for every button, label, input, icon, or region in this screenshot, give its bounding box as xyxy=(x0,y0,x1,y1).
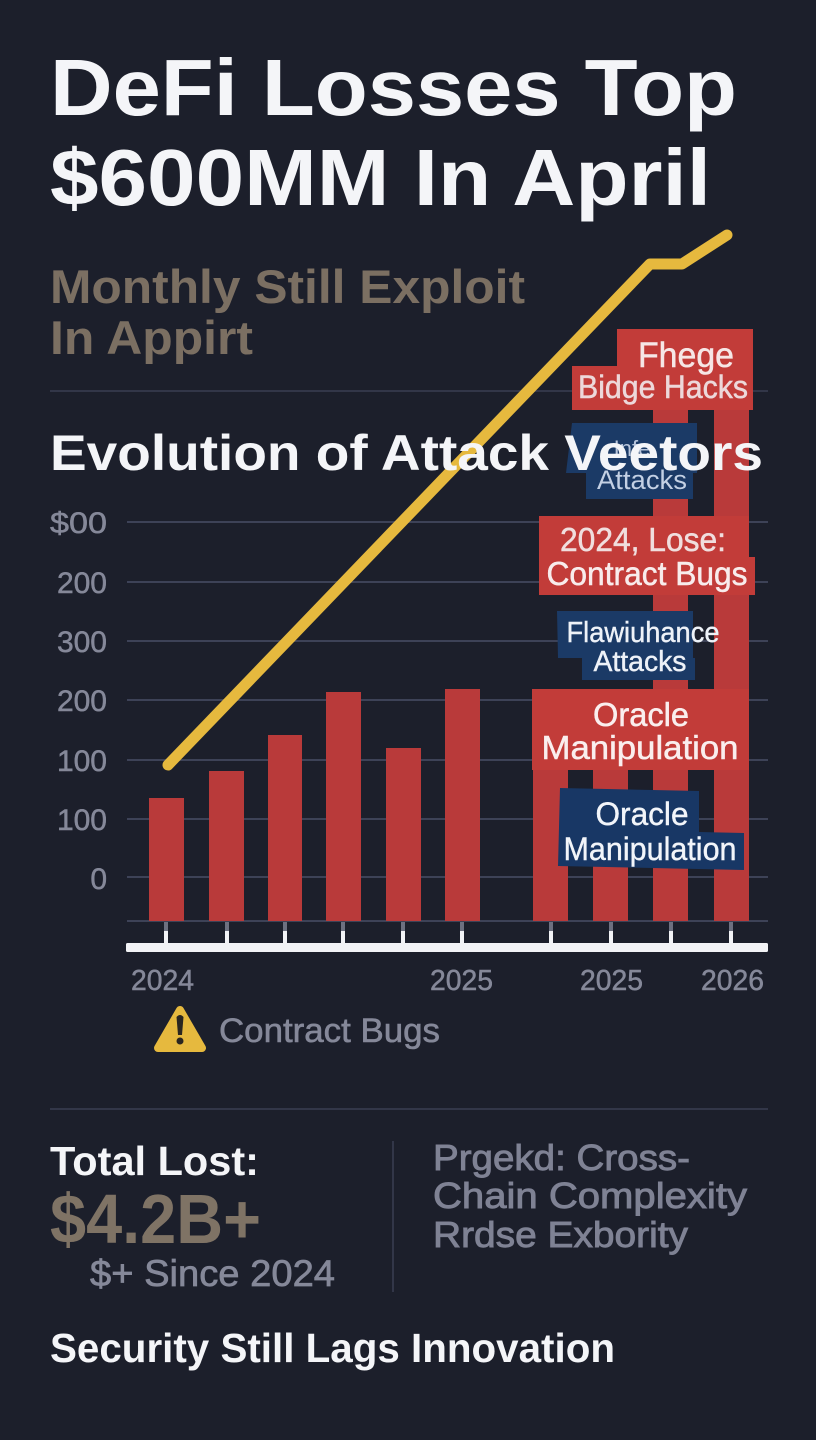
x axis xyxy=(126,922,768,952)
callout: flash loan attacks xyxy=(557,611,720,680)
callout: oracle manipulation red: Oracle xyxy=(593,696,689,733)
subtitle: Monthly Still Exploit xyxy=(50,260,525,313)
callout: bridge hacks xyxy=(572,329,753,410)
x axis labels: 2026 xyxy=(701,965,764,997)
y axis labels: 100 xyxy=(57,745,107,778)
x axis labels: 2024 xyxy=(131,965,194,997)
y axis labels: 200 xyxy=(57,567,107,600)
yellow trend line xyxy=(168,235,727,765)
text block: cross-chain complexity: Rrdse Exbority xyxy=(433,1214,688,1255)
callout: oracle manipulation blue: Oracle xyxy=(596,796,688,832)
y axis labels: $00 xyxy=(50,507,107,540)
x axis labels xyxy=(131,965,764,997)
stat: total lost: Total Lost: xyxy=(50,1138,259,1184)
callout: attacks: Attacks xyxy=(597,465,687,495)
callout: oracle manipulation red xyxy=(532,689,749,770)
x axis labels: 2025 xyxy=(430,965,493,997)
callout: bridge hacks: Bidge Hacks xyxy=(578,369,748,405)
heading: evolution of attack vectors: Evolution of Attack Veetors xyxy=(50,425,763,481)
y axis labels: 300 xyxy=(57,626,107,659)
callout: flash loan attacks: Attacks xyxy=(594,646,686,678)
text block: cross-chain complexity: Chain Complexity xyxy=(433,1175,747,1216)
title xyxy=(50,43,737,222)
y axis labels: 200 xyxy=(57,685,107,718)
legend label: contract bugs: Contract Bugs xyxy=(219,1012,440,1050)
stat: total lost: $+ Since 2024 xyxy=(90,1253,335,1294)
callout: oracle manipulation blue xyxy=(558,788,744,870)
title: $600MM In April xyxy=(50,133,711,222)
red bars xyxy=(149,330,749,921)
y axis labels: 0 xyxy=(90,863,107,896)
callout: oracle manipulation red: Manipulation xyxy=(542,729,738,766)
y axis labels xyxy=(50,507,107,896)
stat: total lost: $4.2B+ xyxy=(50,1180,261,1258)
callout: flash loan attacks: Flawiuhance xyxy=(566,617,720,649)
icon: warning triangle xyxy=(158,1010,202,1048)
subtitle xyxy=(50,260,525,364)
subtitle: In Appirt xyxy=(50,311,253,364)
text block: cross-chain complexity xyxy=(433,1137,747,1255)
chart: attack vectors xyxy=(50,235,768,997)
callout: contract bugs xyxy=(539,516,755,595)
title: DeFi Losses Top xyxy=(50,43,737,132)
stat: total lost xyxy=(50,1138,335,1294)
callout: attacks: Infe xyxy=(614,436,650,461)
callout: oracle manipulation blue: Manipulation xyxy=(564,831,736,867)
text block: cross-chain complexity: Prgekd: Cross- xyxy=(433,1137,690,1178)
y axis labels: 100 xyxy=(57,804,107,837)
callout: contract bugs: 2024, Lose: xyxy=(560,521,726,558)
callout: bridge hacks: Fhege xyxy=(638,336,734,375)
callout: attacks xyxy=(566,423,697,499)
callout: contract bugs: Contract Bugs xyxy=(546,555,748,592)
x axis labels: 2025 xyxy=(580,965,643,997)
closing statement: Security Still Lags Innovation xyxy=(50,1325,615,1371)
